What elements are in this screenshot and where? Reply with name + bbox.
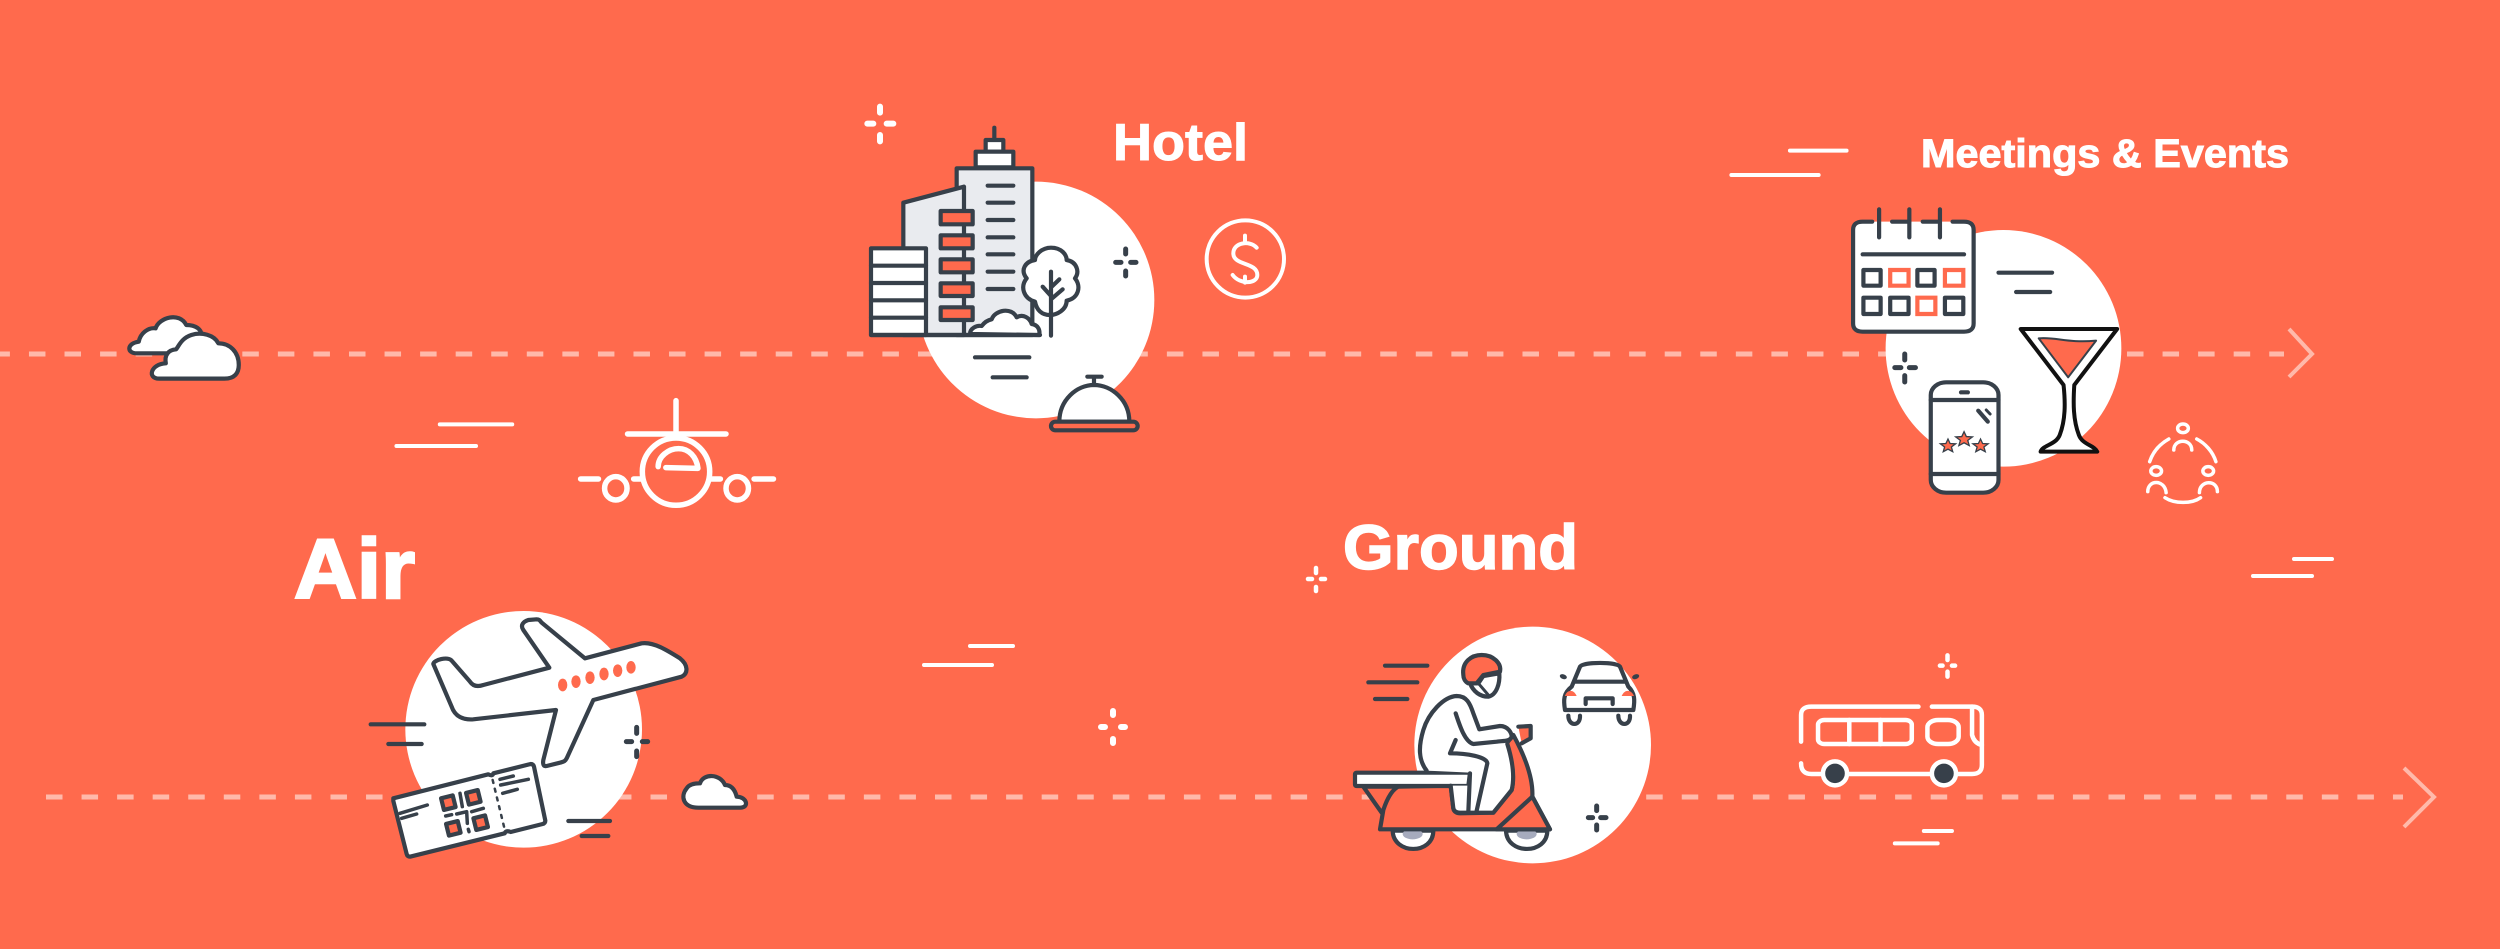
sparkle dark bbox=[1116, 249, 1136, 276]
icon: bus bbox=[1801, 707, 1982, 785]
hotel circle bbox=[918, 182, 1154, 418]
ground circle bbox=[1414, 627, 1651, 863]
panel: Hotel bbox=[867, 107, 1284, 430]
speed lines: centre bbox=[924, 646, 1013, 665]
sparkle dark bbox=[1588, 806, 1606, 830]
heading: Meetings & Events: Meetings & Events bbox=[1921, 132, 2289, 176]
speed lines bbox=[371, 724, 610, 836]
panel: Air bbox=[371, 611, 746, 857]
meetings circle bbox=[1886, 230, 2121, 467]
sparkle dark bbox=[1895, 354, 1915, 382]
heading: Hotel: Hotel bbox=[1113, 114, 1248, 172]
icon: scooter bbox=[1355, 726, 1550, 829]
sparkle: centre bbox=[1101, 711, 1125, 743]
icon: front cloud bbox=[152, 334, 239, 379]
icon: phone with stars bbox=[1931, 382, 1999, 493]
panel: bus and decorations bbox=[1801, 655, 1982, 843]
air circle bbox=[405, 611, 642, 848]
icon: wheels bbox=[1393, 829, 1547, 849]
sparkle white bbox=[867, 107, 893, 141]
heading: Air: Air bbox=[294, 522, 415, 616]
icon: back cloud bbox=[129, 317, 202, 353]
icon: tree bbox=[1023, 248, 1078, 336]
panel: left clouds, front plane and speed lines bbox=[129, 317, 773, 505]
speed lines bbox=[975, 357, 1029, 377]
panel: Ground bbox=[1355, 627, 1651, 863]
icon: networking people bbox=[2148, 424, 2217, 502]
icon: cloud bbox=[683, 776, 746, 808]
icon: boarding pass bbox=[393, 764, 545, 857]
dashed arrow: upper route bbox=[0, 329, 2312, 377]
dashed arrow: lower route bbox=[46, 768, 2434, 827]
speed lines white bbox=[1895, 831, 1952, 843]
icon: car bbox=[1559, 663, 1640, 724]
speed lines white bbox=[1731, 151, 1847, 175]
icon: calendar bbox=[1853, 209, 1974, 332]
speed lines bbox=[396, 424, 512, 446]
speed lines bbox=[1368, 666, 1427, 699]
icon: rider bbox=[1420, 655, 1513, 813]
icon: service bell bbox=[1051, 377, 1138, 430]
icon: dollar coin bbox=[1207, 220, 1284, 298]
sparkle dark bbox=[626, 727, 648, 757]
heading: Ground: Ground bbox=[1343, 513, 1578, 583]
icon: plane front view bbox=[581, 401, 773, 505]
icon: airplane bbox=[433, 619, 686, 766]
panel: Meetings & Events bbox=[1731, 151, 2217, 502]
icon: martini glass bbox=[2021, 329, 2117, 452]
speed lines: right bbox=[2253, 559, 2332, 576]
speed lines bbox=[1999, 273, 2052, 292]
icon: hotel buildings bbox=[871, 128, 1040, 335]
sparkle: near Ground heading bbox=[1308, 568, 1325, 591]
sparkle white bbox=[1940, 655, 1955, 677]
